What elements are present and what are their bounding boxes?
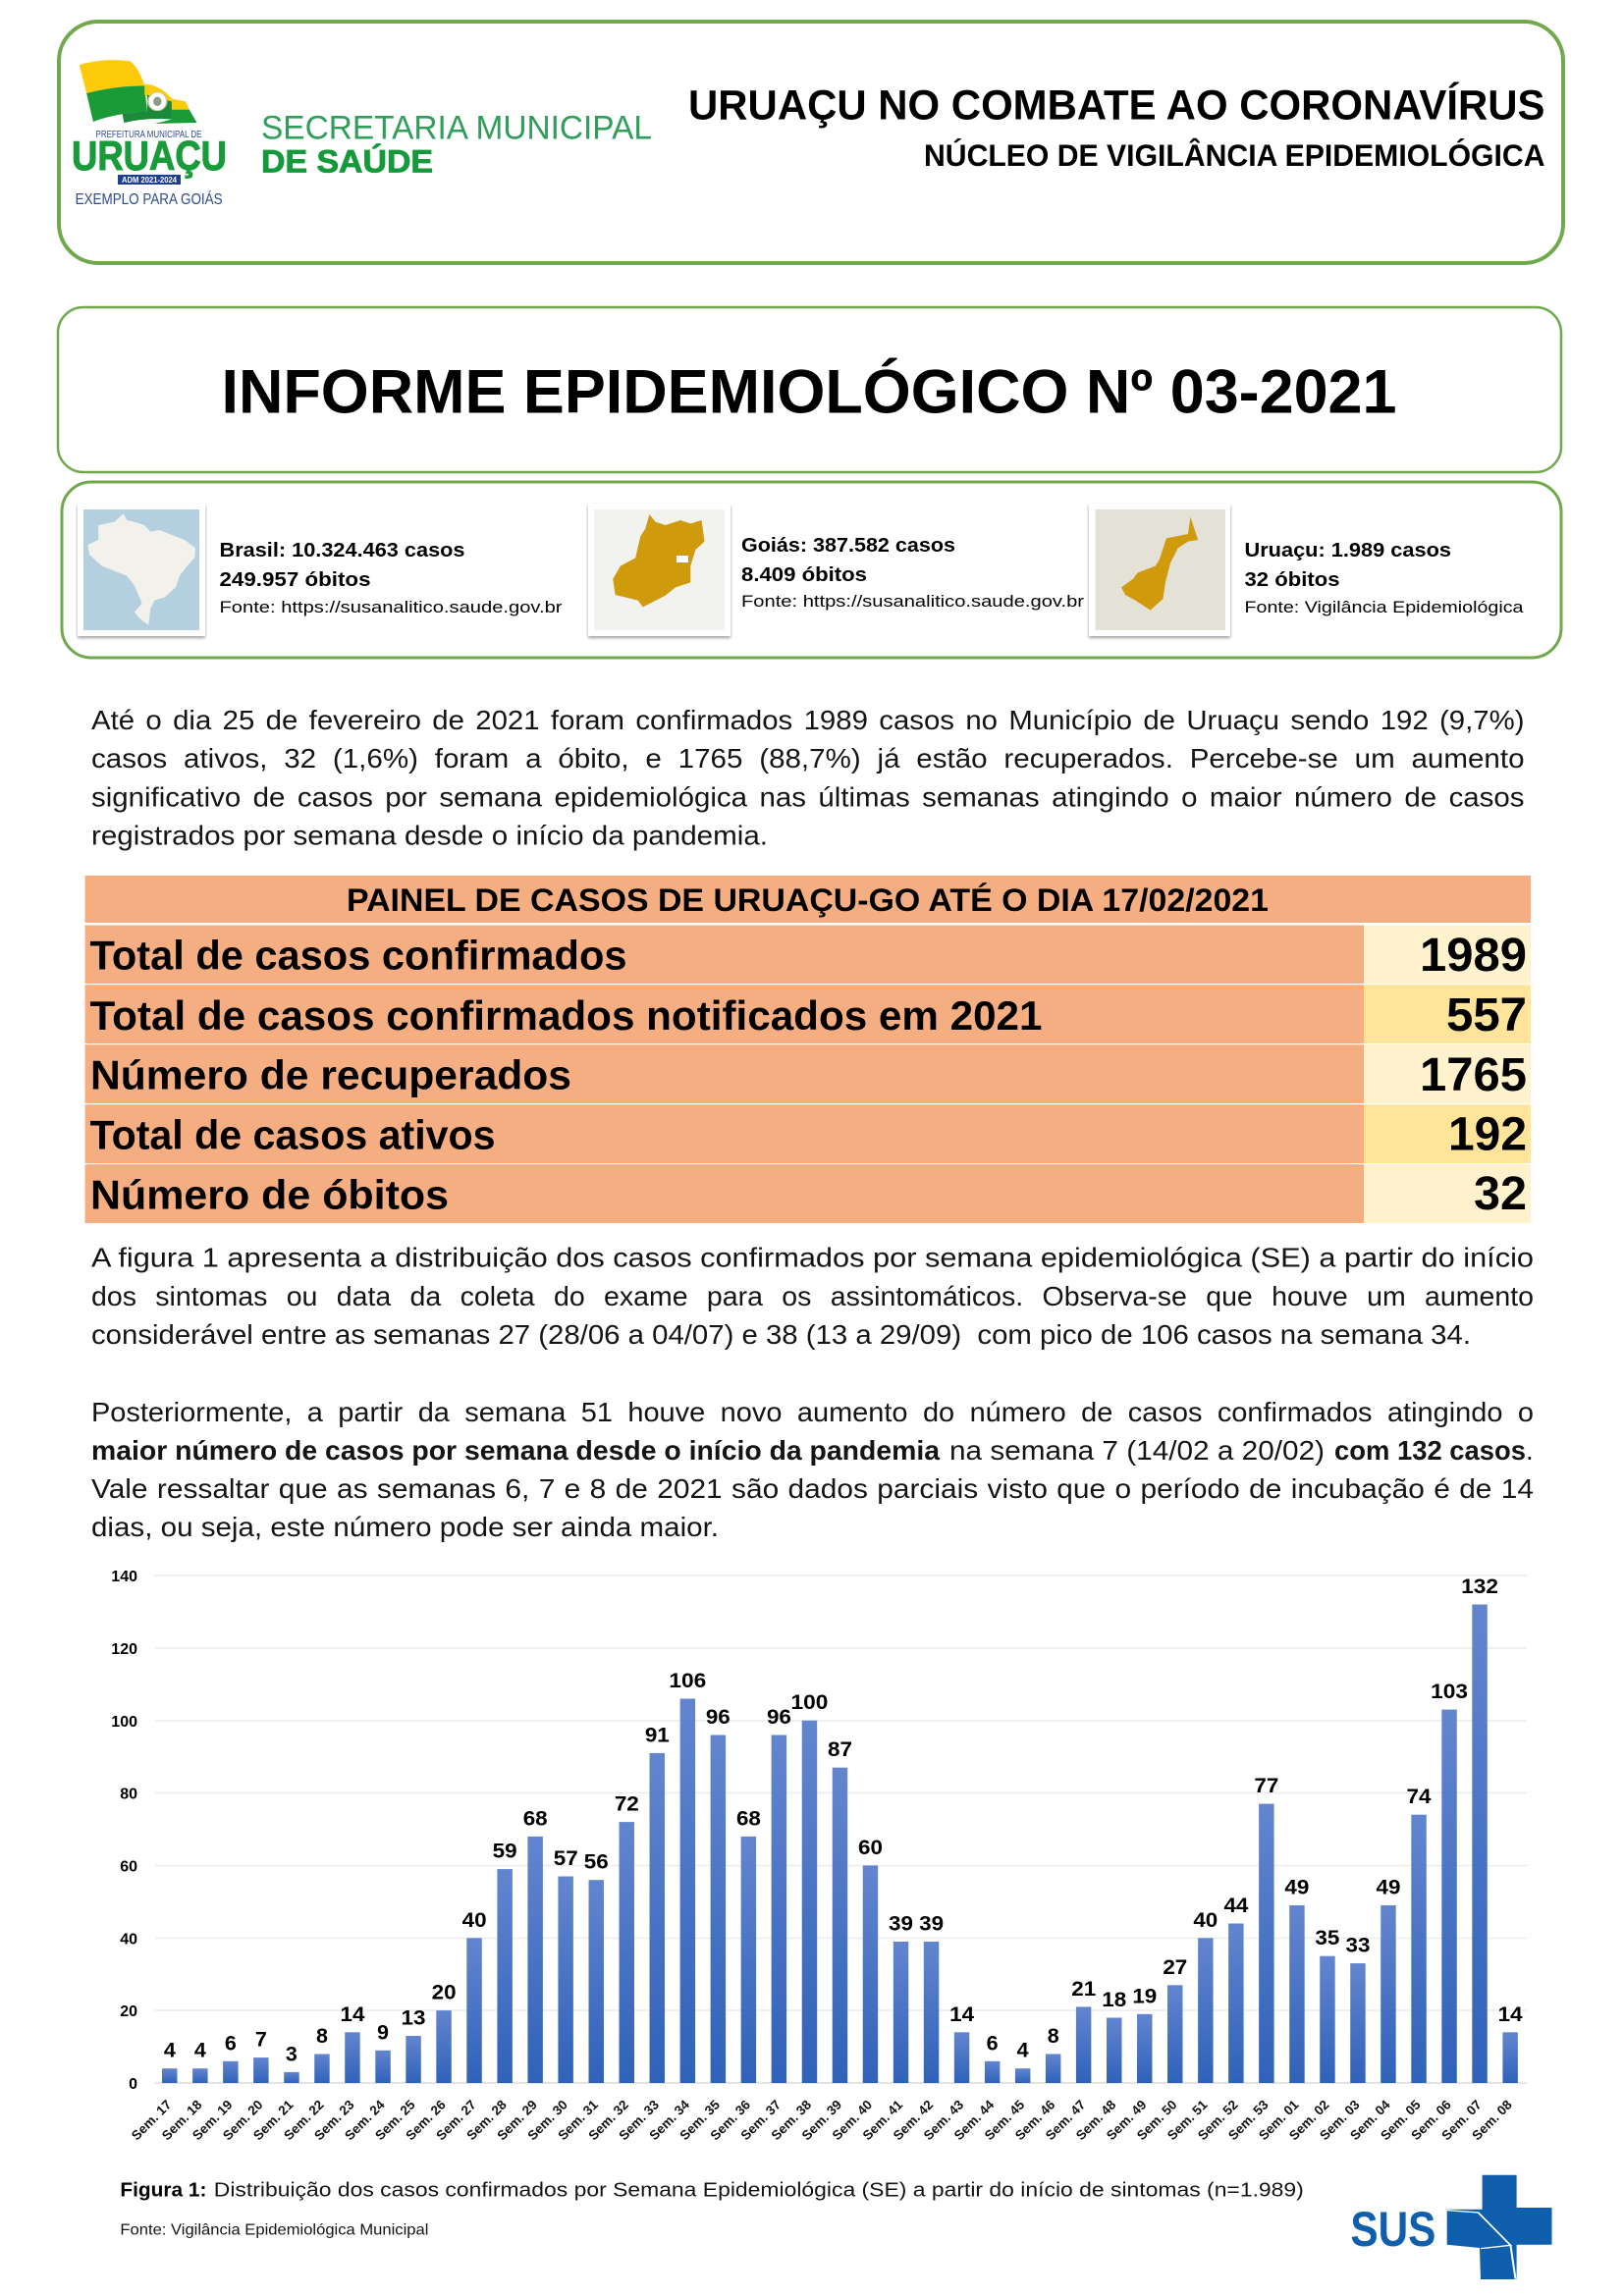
value labels [164,1575,1523,2065]
value labels: 7 [255,2029,267,2052]
value labels: 77 [1254,1775,1278,1797]
x axis labels: Sem. 29 [494,2098,540,2143]
x axis labels: Sem. 31 [555,2097,601,2143]
row: número de recuperados: 1765 [1420,1049,1527,1101]
value labels: 87 [828,1738,852,1761]
text block: new increase paragraph: maior número de casos por semana desde o início da pandemia [91,1435,941,1466]
x axis labels: Sem. 30 [524,2098,570,2143]
x axis labels: Sem. 27 [433,2098,479,2143]
y axis labels: 40 [120,1931,137,1948]
x axis labels: Sem. 04 [1347,2097,1393,2143]
x axis labels: Sem. 02 [1286,2098,1332,2143]
logo badge: ADM 2021-2024: ADM 2021-2024 [122,176,178,185]
x axis labels: Sem. 05 [1378,2097,1424,2143]
text block: figure description: dos sintomas ou data da coleta do exame para os assintomáticos. Observa-se que houve um aumento [91,1281,1534,1311]
text block: intro paragraph: significativo de casos por semana epidemiológica nas últimas semanas atingindo o maior número de casos [91,781,1524,812]
row: total de casos confirmados [90,930,1527,982]
value labels: 14 [341,2003,365,2026]
x axis labels: Sem. 42 [891,2098,936,2143]
value labels: 59 [493,1841,517,1863]
x axis labels: Sem. 33 [616,2098,662,2143]
text: Uruaçu: 32 óbitos [1245,568,1339,591]
text: Uruaçu [1245,539,1524,616]
x axis labels: Sem. 23 [311,2098,357,2143]
value labels: 40 [1193,1909,1218,1932]
value labels: 19 [1132,1985,1157,2007]
x axis labels: Sem. 08 [1469,2097,1515,2143]
row: notificados em 2021: 557 [1446,989,1527,1041]
value labels: 27 [1163,1956,1187,1979]
text: Goiás: Fonte: https://susanalitico.saude.gov.br [741,592,1084,611]
bars [162,1604,1518,2083]
row: notificados em 2021 [90,989,1527,1041]
x axis labels: Sem. 21 [250,2097,297,2143]
source note: Fonte: Vigilância Epidemiológica Municipal [120,2222,428,2239]
value labels: 20 [432,1982,457,2004]
row: número de óbitos [90,1168,1527,1220]
x axis labels: Sem. 38 [769,2097,814,2143]
value labels: 13 [402,2006,425,2030]
x axis labels: Sem. 49 [1104,2098,1150,2143]
row: total de casos confirmados: 1989 [1420,930,1527,982]
text block: intro paragraph: Até o dia 25 de fevereiro de 2021 foram confirmados 1989 casos no Município de Uruaçu sendo 192 (9,7%) [91,705,1525,735]
figure caption: Distribuição dos casos confirmados por Semana Epidemiológica (SE) a partir do início de sintomas (n=1.989) [214,2180,1304,2202]
y axis labels: 60 [120,1858,137,1875]
figure caption: Figura 1: [120,2180,206,2202]
x axis labels: Sem. 44 [951,2097,998,2143]
value labels: 8 [316,2025,328,2048]
icon: flags [80,60,197,124]
x axis labels: Sem. 32 [585,2098,631,2143]
heading: Uruaçu no combate: URUAÇU NO COMBATE AO CORONAVÍRUS [688,82,1545,130]
value labels: 33 [1346,1935,1370,1957]
row: número de óbitos: 32 [1474,1168,1527,1220]
text block: figure description: A figura 1 apresenta a distribuição dos casos confirmados por semana epidemiológica (SE) a partir do início [91,1243,1534,1273]
x axis labels: Sem. 40 [830,2098,875,2143]
x axis labels: Sem. 28 [463,2097,510,2143]
value labels: 132 [1461,1575,1498,1598]
value labels: 14 [1498,2003,1523,2026]
x axis labels: Sem. 51 [1164,2097,1211,2143]
text block: intro paragraph [91,705,1525,851]
value labels: 96 [767,1706,791,1729]
x axis labels: Sem. 17 [129,2098,175,2143]
value labels: 6 [987,2032,999,2055]
logo text: de saúde: DE SAÚDE [261,144,433,180]
text block: figure description [91,1243,1534,1350]
y axis labels: 140 [111,1569,137,1585]
x axis labels: Sem. 37 [738,2098,784,2143]
text block: intro paragraph: registrados por semana desde o início da pandemia. [91,821,768,851]
map card: Goiás [588,504,731,636]
x axis labels: Sem. 07 [1438,2098,1485,2143]
x axis labels: Sem. 41 [860,2097,906,2143]
panel: summary by region [62,482,1561,658]
icon: SUS cross [1447,2175,1551,2279]
text block: intro paragraph: casos ativos, 32 (1,6%) foram a óbito, e 1765 (88,7%) já estão recuperados. Percebe-se um aumento [91,743,1524,774]
text block: new increase paragraph [91,1397,1534,1542]
value labels: 103 [1431,1681,1468,1703]
value labels: 6 [225,2032,237,2055]
x axis labels: Sem. 25 [372,2097,418,2143]
y axis labels: 0 [129,2076,137,2093]
y axis labels: 100 [111,1714,137,1731]
x axis labels: Sem. 45 [982,2097,1028,2143]
value labels: 18 [1102,1989,1127,2011]
value labels: 60 [858,1837,883,1859]
map card: Brasil [78,504,205,636]
value labels: 21 [1071,1978,1097,2001]
value labels: 14 [949,2003,974,2026]
chart: casos por semana epidemiológica [111,1569,1527,2143]
value labels: 96 [706,1706,731,1729]
row: total de casos confirmados: Total de casos confirmados [90,933,626,978]
y axis labels [111,1569,137,2093]
logo: SUS: SUS [1350,2202,1435,2257]
text: Uruaçu: Fonte: Vigilância Epidemiológica [1245,598,1524,616]
x axis labels: Sem. 06 [1408,2098,1454,2143]
x axis labels: Sem. 20 [220,2098,266,2143]
x axis labels: Sem. 01 [1256,2097,1302,2143]
text: Uruaçu: Uruaçu: 1.989 casos [1245,539,1451,561]
text block: figure description: considerável entre as semanas 27 (28/06 a 04/07) e 38 (13 a 29/09) com pico de 106 casos na semana 34. [91,1319,1471,1350]
x axis labels: Sem. 35 [677,2097,723,2143]
x axis labels: Sem. 46 [1012,2098,1057,2143]
value labels: 91 [645,1724,670,1746]
row: número de recuperados [90,1049,1527,1101]
logo text: exemplo para Goiás: EXEMPLO PARA GOIÁS [76,189,223,208]
value labels: 4 [1017,2040,1029,2062]
x axis labels: Sem. 24 [342,2097,388,2143]
x axis labels: Sem. 19 [189,2098,236,2143]
table heading: PAINEL DE CASOS DE URUAÇU-GO ATÉ O DIA 17/02/2021 [347,881,1269,918]
row: total de casos ativos: Total de casos ativos [90,1112,495,1158]
value labels: 40 [462,1909,487,1932]
x axis labels: Sem. 39 [799,2098,844,2143]
text: Brasil: Fonte: https://susanalitico.saude.gov.br [220,598,563,616]
value labels: 106 [669,1670,706,1692]
y axis labels: 80 [120,1786,137,1802]
row: número de óbitos: Número de óbitos [90,1171,449,1217]
value labels: 56 [584,1851,609,1874]
text block: new increase paragraph: na semana 7 (14/02 a 20/02) [949,1435,1325,1466]
value labels: 35 [1315,1927,1340,1949]
value labels: 3 [286,2043,298,2065]
value labels: 4 [164,2040,176,2062]
x axis labels: Sem. 50 [1134,2098,1180,2143]
map card: Uruaçu [1089,504,1230,636]
text block: new increase paragraph: . [1526,1435,1534,1466]
x axis labels: Sem. 48 [1073,2097,1119,2143]
text: Goiás [741,534,1084,611]
title: INFORME EPIDEMIOLÓGICO Nº 03-2021 [222,357,1396,426]
value labels: 49 [1377,1876,1400,1899]
x axis labels: Sem. 03 [1317,2098,1363,2143]
value labels: 39 [889,1912,913,1936]
x axis labels: Sem. 18 [159,2097,205,2143]
row: total de casos ativos [90,1109,1527,1160]
value labels: 72 [615,1793,639,1816]
x axis labels: Sem. 52 [1195,2098,1241,2143]
value labels: 74 [1407,1786,1432,1808]
text: Brasil [220,539,563,616]
x axis labels: Sem. 34 [646,2097,692,2143]
x axis labels [129,2097,1515,2143]
text block: new increase paragraph: Posteriormente, a partir da semana 51 houve novo aumento do número de casos confirmados atingindo o [91,1397,1534,1427]
logo: SUS [1350,2175,1551,2279]
panel: header [59,22,1563,263]
y axis labels: 120 [111,1641,137,1658]
value labels: 4 [194,2040,206,2062]
x axis labels: Sem. 43 [921,2098,966,2143]
value labels: 49 [1284,1876,1309,1899]
text: Goiás: Goiás: 387.582 casos [741,534,955,557]
value labels: 100 [790,1691,828,1714]
value labels: 44 [1223,1895,1249,1917]
text block: new increase paragraph: com 132 casos [1334,1435,1526,1466]
value labels: 68 [736,1807,761,1830]
x axis labels: Sem. 36 [708,2098,753,2143]
x axis labels: Sem. 26 [403,2098,449,2143]
text: Goiás: 8.409 óbitos [741,563,867,586]
text: Brasil: Brasil: 10.324.463 casos [220,539,465,561]
y axis labels: 20 [120,2003,137,2020]
value labels: 9 [377,2021,389,2044]
x axis labels: Sem. 22 [281,2098,327,2143]
x axis labels: Sem. 47 [1043,2098,1088,2143]
table: painel de casos [84,876,1531,1223]
value labels: 39 [919,1912,944,1936]
subheading: núcleo de vigilância: NÚCLEO DE VIGILÂNCIA EPIDEMIOLÓGICA [924,137,1545,173]
text block: new increase paragraph: Vale ressaltar que as semanas 6, 7 e 8 de 2021 são dados parciais visto que o período de incubação é de 14 [91,1473,1534,1504]
row: número de recuperados: Número de recuperados [90,1052,571,1098]
text: Brasil: 249.957 óbitos [220,568,371,591]
logo: Prefeitura de Uruaçu [72,60,227,208]
panel: title [58,307,1561,472]
value labels: 68 [523,1807,548,1830]
x axis labels: Sem. 53 [1225,2098,1272,2143]
text block: new increase paragraph: dias, ou seja, este número pode ser ainda maior. [91,1512,719,1542]
value labels: 57 [554,1847,578,1870]
row: total de casos ativos: 192 [1448,1109,1527,1160]
value labels: 8 [1048,2025,1059,2048]
logo text: secretaria: SECRETARIA MUNICIPAL [261,110,652,147]
row: notificados em 2021: Total de casos confirmados notificados em 2021 [90,992,1043,1039]
logo text: prefeitura: PREFEITURA MUNICIPAL DE [96,130,202,140]
logo text: Uruaçu: URUAÇU [72,133,227,179]
